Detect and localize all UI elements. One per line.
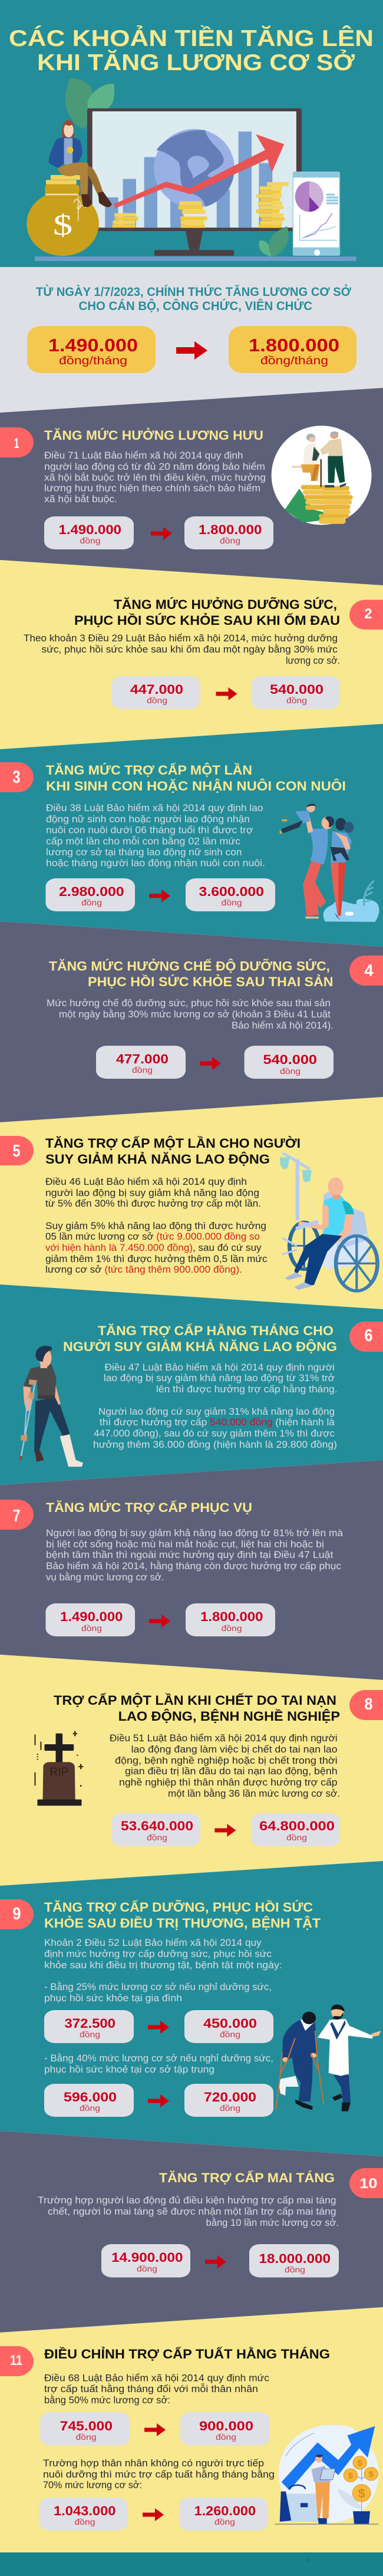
old amount 50%	[40, 2412, 130, 2446]
hero illustration: woman on money bag, monitor chart and tablet: $	[53, 209, 72, 242]
badge 9	[0, 1899, 34, 1929]
new amount: 3.600.000	[199, 884, 264, 899]
old amount: đồng	[80, 536, 100, 545]
badge 1	[0, 427, 34, 457]
body text: Điều 51 Luật Bảo hiểm xã hội 2014 quy định người	[110, 1733, 338, 1744]
old amount	[44, 516, 134, 549]
new amount: đồng	[220, 536, 240, 545]
old amount 40%: đồng	[80, 2103, 100, 2113]
panel: section 9 recovery after injury	[0, 1861, 383, 2156]
badge 3: 3	[13, 767, 20, 787]
old amount: đồng	[81, 1623, 102, 1633]
body text 50%: Điều 68 Luật Bảo hiểm xã hội 2014 quy định mức	[44, 2373, 269, 2383]
body text 70%: 70% mức lương cơ sở:	[43, 2480, 142, 2491]
old amount 50%: 745.000	[60, 2419, 113, 2433]
illustration: elderly couple on coins	[272, 426, 372, 525]
panel: base salary change	[0, 267, 383, 413]
new base salary: 1.800.000	[249, 335, 339, 355]
new amount	[186, 878, 275, 911]
body text: lương hưu thực hiện theo chính sách bảo hiểm	[44, 483, 260, 494]
badge 5	[0, 1136, 34, 1165]
heading	[54, 1693, 340, 1724]
arrow	[143, 2508, 164, 2521]
body text: với hiện hành là 7.450.000 đồng) , sau đó cứ suy	[45, 1243, 262, 1253]
badge 2: 2	[364, 606, 372, 622]
old amount 25%: đồng	[80, 2030, 100, 2039]
heading: TRỢ CẤP MỘT LẦN KHI CHẾT DO TAI NẠN	[54, 1693, 336, 1708]
body text 40%: - Bằng 40% mức lương cơ sở nếu nghỉ dưỡng sức,	[44, 2053, 273, 2064]
body text 50%	[44, 2373, 269, 2406]
heading: PHỤC HỒI SỨC KHỎE SAU THAI SẢN	[88, 974, 334, 989]
old amount: 447.000	[130, 682, 183, 697]
new base salary	[229, 326, 356, 373]
body text	[46, 803, 265, 869]
body text: 05 lần mức lương cơ sở (tức 9.000.000 đồng so	[45, 1231, 260, 1242]
arrow	[214, 1824, 236, 1837]
new amount	[184, 516, 273, 549]
new amount	[186, 1603, 275, 1636]
old amount 25%: 372.500	[65, 2016, 115, 2031]
panel: section 2 recovery after sickness	[0, 560, 383, 749]
old amount 40%	[44, 2084, 134, 2117]
new amount 70%	[179, 2498, 268, 2531]
badge 6: 6	[364, 1326, 372, 1345]
old amount: 2.980.000	[59, 884, 124, 899]
arrow	[200, 1057, 221, 1070]
heading: KHI SINH CON HOẶC NHẬN NUÔI CON NUÔI	[46, 779, 346, 793]
old amount: 477.000	[116, 1052, 169, 1066]
new amount	[251, 676, 340, 709]
body text	[46, 1528, 344, 1583]
body text: - Bằng 25% mức lương cơ sở nếu nghỉ dưỡng sức,	[44, 1981, 272, 1992]
illustration: man with growth arrow, briefcase and coin plant: $	[348, 2472, 353, 2481]
illustration: patient in wheelchair with IV	[280, 1152, 378, 1291]
arrow	[149, 1615, 170, 1628]
old base salary: 1.490.000	[48, 335, 138, 355]
footer band	[0, 2552, 383, 2576]
new amount 50%: đồng	[216, 2432, 236, 2442]
new amount 70%: 1.260.000	[194, 2503, 256, 2518]
body text: lương cơ sở.	[286, 655, 340, 666]
badge 8	[349, 1690, 383, 1720]
panel: section 3 childbirth allowance	[0, 724, 383, 947]
body text: Mức hưởng chế độ dưỡng sức, phục hồi sức khỏe sau thai sản	[47, 998, 331, 1009]
body text	[44, 1938, 282, 2004]
badge 11	[0, 2346, 34, 2376]
heading: effective date: CHO CÁN BỘ, CÔNG CHỨC, VIÊN CHỨC	[79, 299, 312, 313]
body text	[38, 2195, 339, 2228]
illustration: tombstone	[34, 1731, 83, 1806]
old amount: 1.490.000	[59, 522, 121, 537]
body text: Trường hợp người lao động đủ điều kiện hưởng trợ cấp mai táng	[38, 2195, 336, 2206]
heading	[44, 1900, 321, 1931]
old amount	[111, 1813, 200, 1846]
heading: TĂNG TRỢ CẤP MỘT LẦN CHO NGƯỜI	[45, 1136, 301, 1151]
heading: TĂNG TRỢ CẤP MAI TÁNG	[159, 2170, 335, 2185]
body text: Theo khoản 3 Điều 29 Luật Bảo hiểm xã hội 2014, mức hưởng dưỡng	[24, 633, 338, 644]
badge 10	[349, 2168, 383, 2198]
arrow	[205, 2255, 226, 2268]
body text: Người lao động bị suy giảm khả năng lao động từ 81% trở lên mà	[46, 1528, 344, 1539]
body text: người lao động bị suy giảm khả năng lao động	[45, 1188, 259, 1198]
badge 9: 9	[13, 1905, 21, 1923]
body text: bằng 10 lần mức lương cơ sở.	[206, 2217, 339, 2228]
new amount: 1.800.000	[199, 522, 262, 537]
old amount: 1.490.000	[60, 1609, 123, 1624]
heading: effective date	[36, 285, 351, 313]
badge 4: 4	[364, 961, 374, 980]
new amount	[249, 2244, 339, 2278]
body text	[44, 450, 266, 505]
body text: một ngày bằng 30% mức lương cơ sở (khoản 3 Điều 41 Luật	[59, 1009, 331, 1020]
heading: TĂNG MỨC HƯỞNG CHẾ ĐỘ DƯỠNG SỨC,	[49, 959, 330, 974]
body text: Suy giảm 5% khả năng lao động thì được hưởng	[45, 1221, 266, 1231]
body text 50%: trợ cấp tuất hằng tháng đối với mỗi thân nhân	[44, 2383, 258, 2394]
body text: hưởng thêm 36.000 đồng (hiện hành là 29.800 đồng)	[93, 1439, 337, 1450]
body text: Điều 47 Luật Bảo hiểm xã hội 2014 quy định người	[105, 1362, 335, 1373]
badge 8: 8	[364, 1695, 372, 1713]
body text: xã hội bắt buộc trở lên thì điều kiện, mức hưởng	[44, 472, 266, 483]
old amount 70%	[39, 2498, 128, 2531]
heading: effective date: TỪ NGÀY 1/7/2023, CHÍNH THỨC TĂNG LƯƠNG CƠ SỞ	[36, 285, 351, 299]
body text: chết, người lo mai táng sẽ được nhận một lần trợ cấp mai táng	[48, 2206, 336, 2217]
old amount: 14.900.000	[111, 2250, 183, 2265]
new amount: 18.000.000	[259, 2251, 331, 2266]
heading	[45, 1136, 301, 1167]
old amount: đồng	[81, 898, 102, 907]
body text	[110, 1733, 340, 1799]
new amount: đồng	[286, 1833, 307, 1842]
new amount 25%: đồng	[220, 2030, 240, 2039]
body text: lao động bị suy giảm khả năng lao động từ 31% trở	[104, 1373, 335, 1383]
hero illustration: woman on money bag, monitor chart and tablet	[27, 78, 356, 261]
body text 50%: bằng 50% mức lương cơ sở:	[44, 2394, 170, 2406]
new amount: đồng	[280, 1066, 301, 1076]
heading	[46, 763, 346, 793]
body text: hoặc tháng người lao động nhận nuôi con nuôi.	[46, 858, 265, 869]
illustration: family lifting child	[280, 803, 379, 922]
body text: nuôi con nuôi dưới 06 tháng tuổi thì được trợ	[46, 825, 253, 836]
new amount 40%: 720.000	[204, 2090, 256, 2104]
body text 40%	[44, 2053, 273, 2075]
panel: section 1 pension	[0, 388, 383, 585]
arrow	[216, 687, 237, 700]
body text: người lao động có từ đủ 20 năm đóng bảo hiểm	[44, 462, 265, 472]
heading: TĂNG MỨC HƯỞNG DƯỠNG SỨC,	[114, 597, 337, 612]
heading: TĂNG TRỢ CẤP HẰNG THÁNG CHO	[98, 1323, 334, 1338]
body text: thì được hưởng trợ cấp 540.000 đồng (hiện hành là	[100, 1417, 335, 1428]
old amount	[96, 1046, 186, 1079]
panel: hero header	[0, 0, 383, 267]
new amount: 64.800.000	[259, 1819, 335, 1833]
panel: section 8 death benefit	[0, 1655, 383, 1886]
body text: phục hồi sức khỏe tại gia đình	[44, 1993, 182, 2004]
arrow	[148, 2021, 169, 2034]
new amount: đồng	[286, 696, 307, 705]
badge 11: 11	[10, 2353, 22, 2369]
body text: Điều 46 Luật Bảo hiểm xã hội 2014 quy định	[45, 1177, 247, 1187]
illustration: tombstone: RIP	[50, 1765, 68, 1778]
old amount 25%	[44, 2010, 134, 2043]
heading: LAO ĐỘNG, BỆNH NGHỀ NGHIỆP	[118, 1709, 340, 1724]
body text: 447.000 đồng), sau đó cứ suy giảm thêm 1% thì được	[94, 1428, 335, 1439]
panel: section 5 one-time disability allowance	[0, 1097, 383, 1309]
new amount: 540.000	[270, 682, 323, 697]
body text: Người lao động cứ suy giảm 31% khả năng lao động	[98, 1406, 335, 1417]
new amount 25%	[184, 2010, 273, 2043]
new amount 70%: đồng	[214, 2517, 235, 2526]
panel: section 6 monthly disability allowance	[0, 1284, 383, 1485]
body text: Bảo hiểm xã hội 2014, hằng tháng còn được hưởng trợ cấp phục	[46, 1560, 341, 1572]
old amount 70%: 1.043.000	[54, 2503, 115, 2518]
body text: lương cơ sở (tức tăng thêm 900.000 đồng).	[45, 1264, 242, 1275]
new base salary: đồng/tháng	[260, 355, 328, 367]
body text: Bảo hiểm xã hội 2014).	[232, 1020, 334, 1031]
body text: định mức hưởng trợ cấp dưỡng sức, phục hồi sức	[44, 1949, 272, 1959]
body text: xã hội bắt buộc.	[44, 493, 117, 505]
body text: bị liệt cột sống hoặc mù hai mắt hoặc cụt, liệt hai chi hoặc bị	[46, 1539, 324, 1550]
arrow	[149, 890, 170, 902]
body text: Điều 38 Luật Bảo hiểm xã hội 2014 quy định lao	[46, 803, 263, 813]
body text: Điều 71 Luật Bảo hiểm xã hội 2014 quy định	[44, 450, 243, 461]
old amount	[111, 676, 200, 709]
new amount: 540.000	[263, 1052, 317, 1067]
body text: lương cơ sở tại tháng lao động nữ sinh con	[46, 847, 242, 858]
heading: TĂNG TRỢ CẤP DƯỠNG, PHỤC HỒI SỨC	[44, 1900, 313, 1915]
badge 1: 1	[14, 436, 19, 452]
heading	[49, 959, 334, 989]
badge 7: 7	[13, 1507, 20, 1526]
new amount: đồng	[222, 898, 242, 907]
illustration: man with growth arrow, briefcase and coin plant: $	[358, 2459, 362, 2468]
body text 40%: phục hồi sức khoẻ tại cơ sở tập trung	[44, 2064, 214, 2075]
body text 70%: Trường hợp thân nhân không có người trực tiếp	[43, 2458, 264, 2469]
old amount: đồng	[147, 696, 167, 705]
badge 3	[0, 762, 34, 792]
old amount 40%: 596.000	[64, 2090, 117, 2104]
illustration: man with growth arrow, briefcase and coin plant	[275, 2425, 379, 2525]
heading: SUY GIẢM KHẢ NĂNG LAO ĐỘNG	[45, 1152, 270, 1167]
body text: giảm thêm 1% thì được hưởng thêm 0,5 lần mức	[45, 1254, 268, 1264]
new amount 40%	[184, 2084, 273, 2117]
old amount	[101, 2244, 190, 2278]
heading: TĂNG MỨC TRỢ CẤP MỘT LẦN	[46, 763, 252, 778]
body text 70%: nuôi dưỡng thì mức trợ cấp tuất hằng tháng bằng	[43, 2469, 275, 2480]
body text: cấp một lần cho mỗi con bằng 02 lần mức	[46, 835, 240, 846]
arrow	[148, 2094, 169, 2107]
heading	[74, 597, 340, 628]
heading: TĂNG MỨC HƯỞNG LƯƠNG HƯU	[44, 428, 263, 443]
body text: gian điều trị lần đầu do tai nạn lao động, bệnh	[125, 1766, 338, 1777]
body text 70%	[43, 2458, 275, 2491]
body text: khỏe sau khi điều trị thương tật, bệnh tật một ngày:	[44, 1960, 282, 1971]
new amount	[251, 1813, 340, 1846]
old amount	[46, 878, 135, 911]
new amount	[245, 1046, 334, 1079]
body text: lên thì được hưởng trợ cấp hằng tháng.	[156, 1383, 338, 1395]
new amount: đồng	[285, 2265, 305, 2274]
new amount 40%: đồng	[220, 2103, 240, 2113]
body text: động nữ sinh con hoặc người lao động nhận	[46, 814, 250, 825]
panel: section 11 monthly survivor allowance	[0, 2307, 383, 2552]
new amount 50%: 900.000	[199, 2419, 253, 2433]
old amount: đồng	[147, 1833, 167, 1842]
old amount: đồng	[132, 1065, 153, 1075]
badge 5: 5	[13, 1142, 20, 1161]
body text: nghề nghiệp thì thân nhân được hưởng trợ cấp	[119, 1777, 338, 1788]
body text: động, bệnh nghề nghiệp hoặc bị chết trong thời	[115, 1755, 338, 1766]
body text: sức, phục hồi sức khỏe sau khi ốm đau một ngày bằng 30% mức	[41, 644, 338, 655]
body text	[47, 998, 334, 1031]
illustration: man with growth arrow, briefcase and coin plant: $	[358, 2486, 365, 2501]
illustration: man with growth arrow, briefcase and coin plant: $	[369, 2470, 374, 2479]
heading: PHỤC HỒI SỨC KHỎE SAU KHI ỐM ĐAU	[74, 612, 340, 628]
old base salary: đồng/tháng	[59, 355, 127, 367]
title: CÁC KHOẢN TIỀN TĂNG LÊN	[9, 25, 374, 51]
old base salary	[27, 326, 156, 373]
body text: vụ bằng mức lương cơ sở.	[46, 1572, 164, 1583]
new amount: đồng	[222, 1623, 242, 1633]
badge 4	[349, 956, 383, 986]
arrow	[176, 341, 207, 360]
old amount: đồng	[137, 2264, 157, 2274]
heading: TĂNG MỨC TRỢ CẤP PHỤC VỤ	[46, 1500, 252, 1515]
body text: bệnh tâm thần thì ngoài mức hưởng quy định tại Điều 47 Luật	[46, 1550, 334, 1560]
panel: section 4 postnatal recovery	[0, 921, 383, 1122]
body text: Khoản 2 Điều 52 Luật Bảo hiểm xã hội 2014 quy	[44, 1938, 262, 1948]
title: KHI TĂNG LƯƠNG CƠ SỞ	[37, 50, 355, 75]
body text	[45, 1177, 268, 1275]
badge 2	[349, 600, 383, 630]
panel: section 7 service allowance	[0, 1460, 383, 1680]
illustration: doctor helping patient on crutches	[276, 2004, 381, 2111]
new amount: 1.800.000	[200, 1609, 263, 1624]
badge 7	[0, 1500, 34, 1530]
body text	[24, 633, 340, 666]
old amount	[46, 1603, 135, 1636]
body text: từ 5% đến 30% thì được hưởng trợ cấp một lần.	[45, 1198, 261, 1209]
arrow	[144, 2423, 166, 2436]
panel: section 10 funeral allowance	[0, 2131, 383, 2333]
arrow	[151, 527, 172, 540]
heading	[63, 1323, 337, 1354]
badge 10: 10	[359, 2176, 377, 2192]
heading: KHỎE SAU ĐIỀU TRỊ THƯƠNG, BỆNH TẬT	[44, 1916, 321, 1931]
new amount 25%: 450.000	[203, 2016, 257, 2031]
body text: một lần bằng 36 lần mức lương cơ sở.	[168, 1788, 340, 1799]
heading: NGƯỜI SUY GIẢM KHẢ NĂNG LAO ĐỘNG	[63, 1339, 337, 1354]
title	[9, 25, 374, 75]
body text: lao động đang làm việc bị chết do tai nạn lao	[131, 1744, 338, 1755]
old amount 50%: đồng	[75, 2432, 97, 2442]
old amount: 53.640.000	[121, 1819, 193, 1833]
heading: ĐIỀU CHỈNH TRỢ CẤP TUẤT HẰNG THÁNG	[44, 2347, 330, 2361]
illustration: man with crutch and leg cast	[20, 1346, 83, 1467]
badge 6	[349, 1322, 383, 1352]
new amount 50%	[180, 2412, 270, 2446]
body text	[93, 1362, 338, 1450]
old amount 70%: đồng	[74, 2517, 95, 2526]
